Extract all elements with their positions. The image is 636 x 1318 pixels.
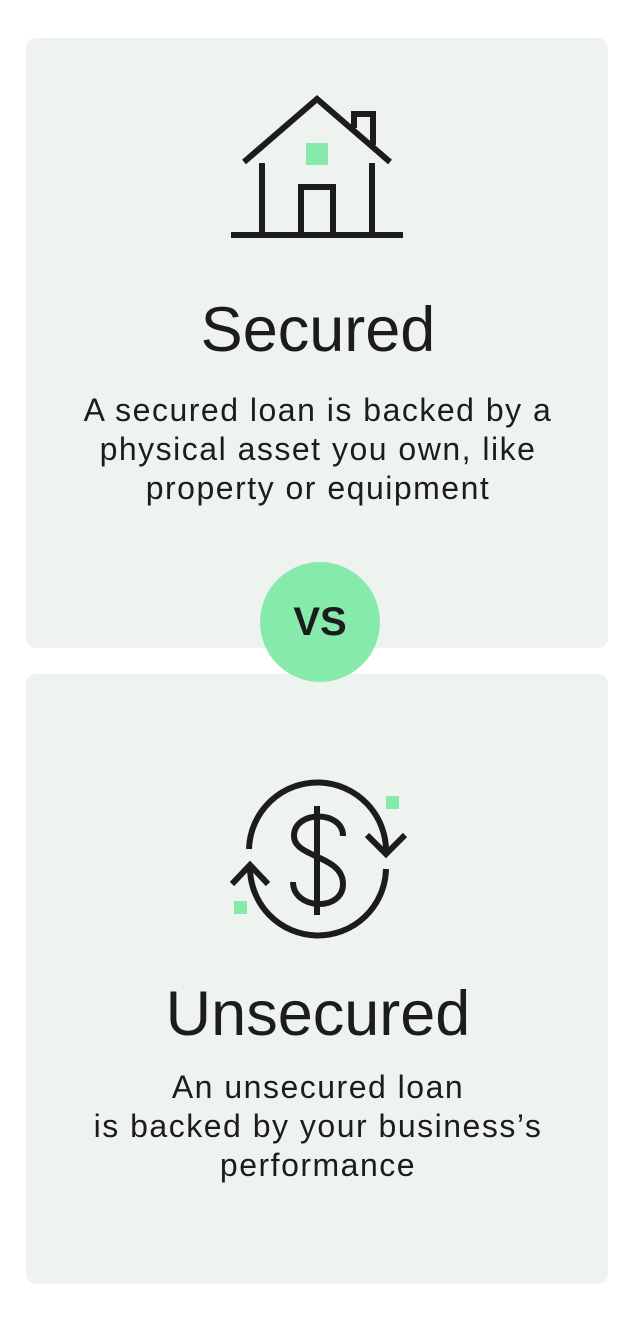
icon: house bbox=[231, 95, 403, 238]
text: unsecured description: An unsecured loan bbox=[172, 1069, 464, 1105]
text: unsecured description: is backed by your business’s bbox=[94, 1108, 542, 1144]
heading: unsecured: Unsecured bbox=[166, 979, 470, 1049]
text: secured description: A secured loan is backed by a bbox=[84, 392, 552, 428]
icon: dollar cycle bbox=[230, 780, 408, 938]
badge: vs bbox=[260, 562, 380, 682]
panel: unsecured bbox=[26, 674, 608, 1284]
heading: secured: Secured bbox=[201, 295, 435, 365]
panel: secured bbox=[26, 38, 608, 648]
badge: vs: VS bbox=[293, 600, 347, 644]
text: unsecured description: performance bbox=[220, 1147, 416, 1183]
text: secured description bbox=[84, 392, 552, 506]
text: unsecured description bbox=[94, 1069, 542, 1183]
text: secured description: physical asset you own, like bbox=[100, 431, 536, 467]
text: secured description: property or equipment bbox=[146, 470, 490, 506]
